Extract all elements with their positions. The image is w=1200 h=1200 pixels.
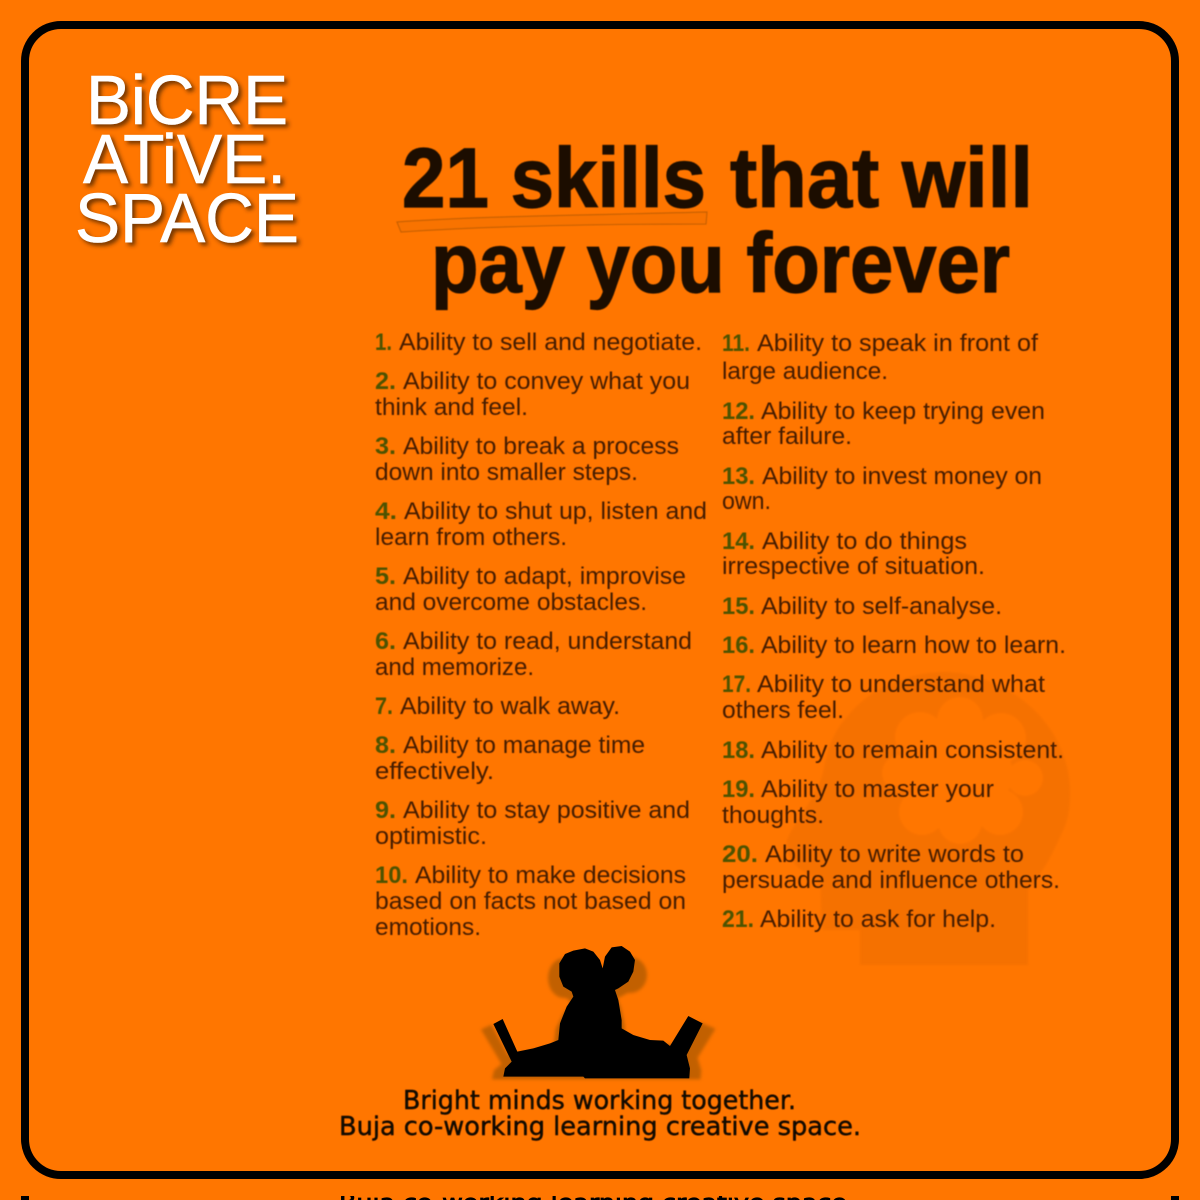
logo: BiCREATiVE.SPACE: SPACE (75, 179, 299, 257)
tagline: Bright minds working together. (403, 1086, 796, 1116)
skill 9 (375, 797, 690, 850)
skill 5: and overcome obstacles. (375, 589, 647, 616)
icon: silhouette of two people with laptops (481, 946, 715, 1079)
skill 9: optimistic. (375, 823, 487, 850)
skill 16: 16. (722, 632, 755, 659)
tagline: Buja co-working learning creative space. (339, 1112, 861, 1142)
skill 8: Ability to manage time (403, 732, 645, 759)
skill 9: Ability to stay positive and (403, 797, 690, 824)
skill 4 (375, 498, 707, 551)
skill 4: learn from others. (375, 524, 567, 551)
skill 2 (375, 368, 690, 421)
skill 21: Ability to ask for help. (760, 906, 996, 933)
skill 7: Ability to walk away. (400, 693, 620, 720)
skill 8: effectively. (375, 758, 494, 785)
logo: BiCREATiVE.SPACE: ATiVE. (83, 120, 286, 198)
skill 6: 6. (375, 628, 396, 655)
skill 10 (375, 862, 686, 941)
title: 21 skills (402, 131, 706, 225)
skill 5 (375, 563, 686, 616)
skill 12: Ability to keep trying even (761, 398, 1045, 425)
clipped repeat of tagline at bottom edge (21, 1196, 1179, 1200)
skill 9: 9. (375, 797, 396, 824)
silhouette figure (493, 946, 703, 1078)
skill 10: Ability to make decisions (415, 862, 686, 889)
skill 14: irrespective of situation. (722, 553, 985, 580)
skill 13: own. (722, 488, 771, 515)
skill 18: 18. (722, 737, 755, 764)
skill 15: Ability to self-analyse. (761, 593, 1002, 620)
skill 21: 21. (722, 906, 754, 933)
title (397, 131, 1033, 310)
skill 2: 2. (375, 368, 396, 395)
skill 13: Ability to invest money on (762, 463, 1042, 490)
skill 10: emotions. (375, 914, 481, 941)
skill 15: 15. (722, 593, 755, 620)
skill 17: Ability to understand what (757, 671, 1045, 698)
skill 14: Ability to do things (762, 528, 967, 555)
skill 3: down into smaller steps. (375, 459, 638, 486)
skill 11: large audience. (722, 358, 888, 385)
skill 3 (375, 433, 679, 486)
skill 10: 10. (375, 862, 408, 889)
skill 17 (722, 671, 1045, 724)
skill 2: Ability to convey what you (403, 368, 690, 395)
skill 1: Ability to sell and negotiate. (399, 329, 702, 356)
skill 17: 17. (722, 671, 751, 698)
logo: BiCREATiVE.SPACE (75, 61, 299, 257)
skill 4: Ability to shut up, listen and (404, 498, 707, 525)
skill 13 (722, 463, 1042, 515)
skill 18: Ability to remain consistent. (761, 737, 1064, 764)
skill 6 (375, 628, 692, 681)
skill 1: 1. (375, 329, 392, 356)
skill 11: Ability to speak in front of (757, 330, 1038, 357)
skill 12: after failure. (722, 423, 852, 450)
skill 7: 7. (375, 693, 393, 720)
silhouette shadow (481, 957, 715, 1079)
skill 8 (375, 732, 645, 785)
skill 19 (722, 776, 994, 829)
watermark: head with brain (787, 672, 1070, 965)
skill 5: 5. (375, 563, 396, 590)
skill 6: Ability to read, understand (403, 628, 692, 655)
skill 6: and memorize. (375, 654, 534, 681)
skill 19: Ability to master your (761, 776, 994, 803)
skill 2: think and feel. (375, 394, 528, 421)
skill 20 (722, 841, 1060, 894)
skill 3: 3. (375, 433, 396, 460)
skill 8: 8. (375, 732, 396, 759)
list: skills 11 to 21 (722, 330, 1066, 933)
skill 20: persuade and influence others. (722, 867, 1060, 894)
skill 11: 11. (722, 330, 750, 357)
title: that will (730, 131, 1033, 225)
skill 3: Ability to break a process (403, 433, 679, 460)
skill 12 (722, 398, 1045, 450)
logo: BiCREATiVE.SPACE: BiCRE (86, 61, 288, 139)
skill 13: 13. (722, 463, 755, 490)
title: pay you forever (431, 216, 1010, 310)
skill 16: Ability to learn how to learn. (761, 632, 1066, 659)
title underline swoosh (397, 212, 707, 232)
skill 14: 14. (722, 528, 755, 555)
list: skills 1 to 10 (375, 329, 707, 941)
skill 14 (722, 528, 985, 580)
skill 10: based on facts not based on (375, 888, 686, 915)
skill 11 (722, 330, 1038, 385)
skill 19: 19. (722, 776, 755, 803)
skill 12: 12. (722, 398, 755, 425)
tagline (339, 1086, 861, 1142)
skill 4: 4. (375, 498, 397, 525)
skill 20: 20. (722, 841, 758, 868)
skill 20: Ability to write words to (765, 841, 1024, 868)
skill 17: others feel. (722, 697, 844, 724)
skill 19: thoughts. (722, 802, 824, 829)
skill 5: Ability to adapt, improvise (403, 563, 686, 590)
